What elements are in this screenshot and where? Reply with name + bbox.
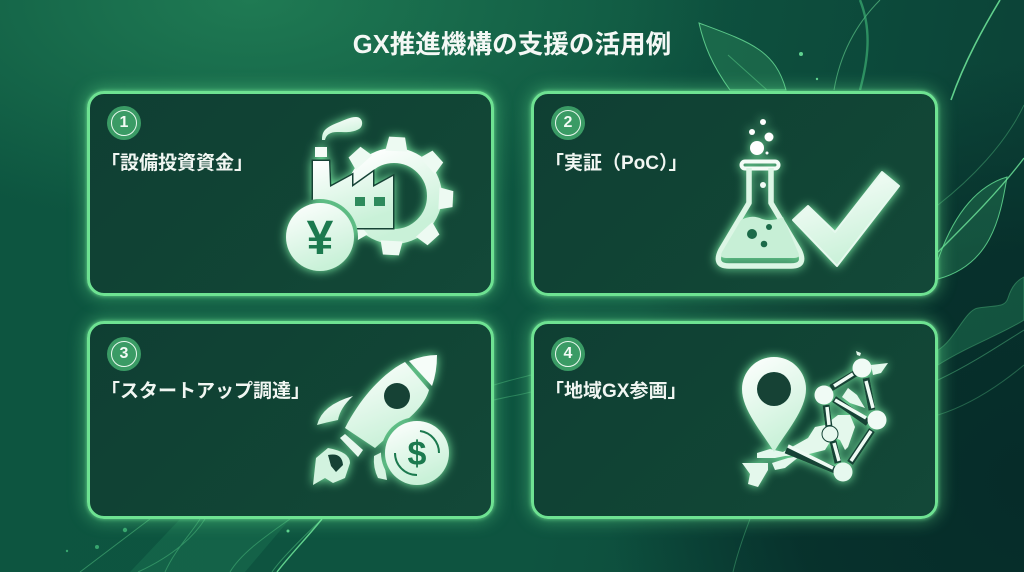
icon: flask and check <box>708 114 906 276</box>
icon: rocket and coin: $ <box>408 435 427 473</box>
badge 3: 3 <box>120 345 128 362</box>
heading 3: 「スタートアップ調達」 <box>101 381 310 402</box>
panel: スタートアップ調達 <box>87 321 494 519</box>
icon: pin and Japan network <box>734 348 894 493</box>
badge 1 <box>107 106 141 140</box>
title: GX推進機構の支援の活用例 <box>353 31 671 59</box>
badge 2 <box>551 106 585 140</box>
heading 1: 「設備投資資金」 <box>101 153 253 174</box>
badge 2: 2 <box>564 114 572 131</box>
heading 2: 「実証（PoC）」 <box>545 153 688 174</box>
panel: 設備投資資金 <box>87 91 494 296</box>
icon: factory gear yen <box>278 110 460 278</box>
icon: factory gear yen: ¥ <box>307 212 334 265</box>
badge 1: 1 <box>120 114 128 131</box>
badge 3 <box>107 337 141 371</box>
badge 4: 4 <box>564 345 572 362</box>
heading 4: 「地域GX参画」 <box>545 381 686 402</box>
icon: rocket and coin <box>306 348 456 492</box>
badge 4 <box>551 337 585 371</box>
panel: 実証 <box>531 91 938 296</box>
panel: 地域GX参画 <box>531 321 938 519</box>
